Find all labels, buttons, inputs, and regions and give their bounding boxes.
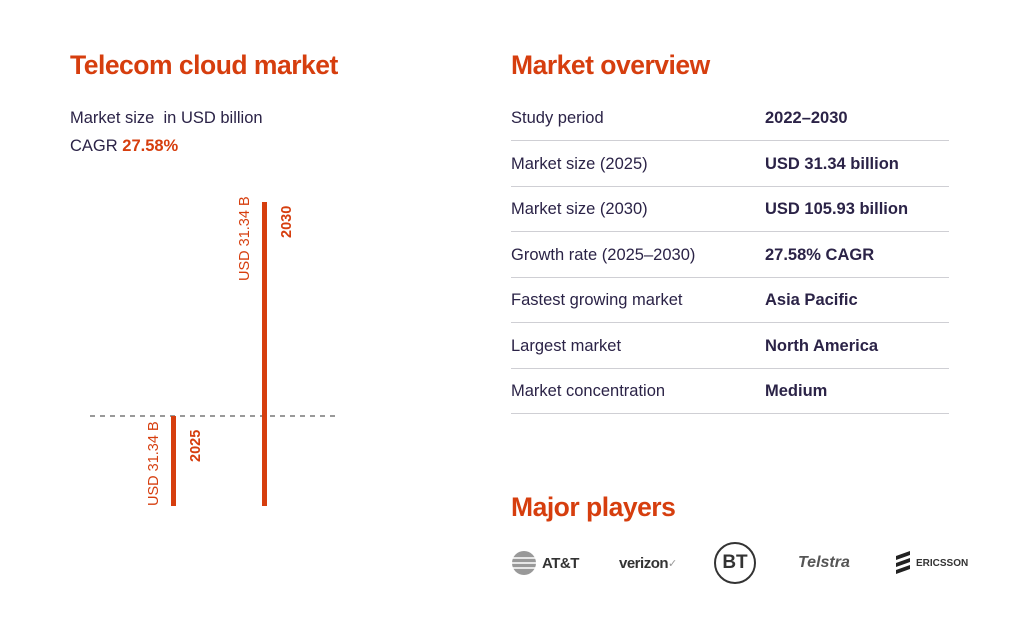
- logo: Telstra: Telstra: [798, 554, 850, 571]
- logo: Ericsson: [896, 551, 968, 574]
- title: major players: Major players: [511, 492, 675, 522]
- text: Market size (2025): [511, 155, 648, 173]
- logo: BT: [714, 542, 756, 584]
- text: 2022–2030: [765, 109, 848, 127]
- bar chart: [90, 196, 335, 506]
- text: Market size (2030): [511, 200, 648, 218]
- text: 27.58% CAGR: [765, 246, 874, 264]
- bar 2025: [146, 416, 204, 506]
- CAGR text: CAGR 27.58%: [70, 137, 178, 155]
- text: Market concentration: [511, 382, 665, 400]
- title: telecom cloud market: Telecom cloud market: [70, 50, 338, 80]
- bar 2030: 2030: [279, 206, 295, 238]
- logo: AT&T: [512, 551, 580, 575]
- text: USD 105.93 billion: [765, 200, 908, 218]
- logo: BT: BT: [722, 552, 748, 573]
- logo: Ericsson: ERICSSON: [916, 558, 968, 568]
- bar 2025: USD 31.34 B: [146, 421, 162, 506]
- bar 2030: USD 31.34 B: [237, 196, 253, 281]
- text: Fastest growing market: [511, 291, 682, 309]
- table: market overview: [511, 109, 949, 414]
- text: Asia Pacific: [765, 291, 858, 309]
- text: Largest market: [511, 337, 621, 355]
- bar 2025: 2025: [188, 430, 204, 462]
- text: North America: [765, 337, 878, 355]
- bar 2030: [237, 196, 295, 506]
- title: market overview: Market overview: [511, 50, 710, 80]
- text: Medium: [765, 382, 827, 400]
- subtitle: market size: Market size in USD billion: [70, 109, 263, 127]
- text: USD 31.34 billion: [765, 155, 899, 173]
- logo: verizon: verizon: [619, 554, 668, 572]
- text: Growth rate (2025–2030): [511, 246, 695, 264]
- logo: verizon: ✓: [668, 558, 677, 570]
- text: Study period: [511, 109, 604, 127]
- logo: AT&T: AT&T: [542, 554, 579, 572]
